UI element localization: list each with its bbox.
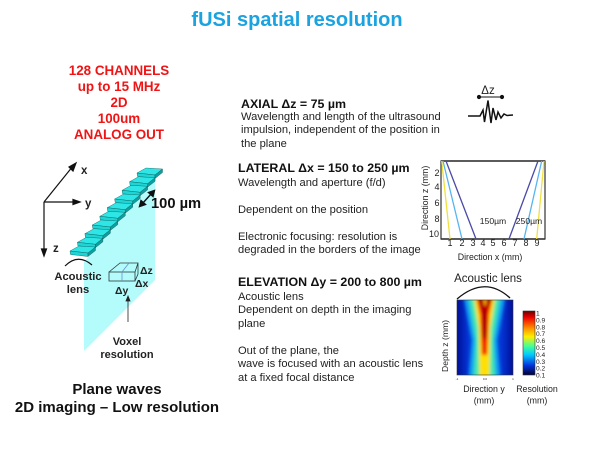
probe specifications: 2D <box>110 95 128 110</box>
transducer array <box>70 168 162 256</box>
plane waves caption: Plane waves <box>72 381 162 398</box>
lateral text: Wavelength and aperture (f/d) <box>238 176 386 188</box>
pulse icon <box>468 85 513 123</box>
acoustic lens heatmap: Acoustic lens <box>454 273 522 285</box>
acoustic lens label: Acoustic <box>54 271 102 283</box>
axes <box>42 163 80 256</box>
voxel cube <box>109 263 138 281</box>
acoustic lens label: lens <box>67 284 89 296</box>
elevation text <box>238 290 423 384</box>
lateral chart: 4 <box>480 238 486 248</box>
axis labels: z <box>53 243 59 255</box>
acoustic lens heatmap: Depth z (mm) <box>440 320 450 372</box>
acoustic lens heatmap: Direction y <box>463 384 505 394</box>
lateral text: Electronic focusing: resolution is <box>238 231 397 243</box>
lateral chart: 2 <box>459 238 465 248</box>
axial text: Wavelength and length of the ultrasound <box>241 110 441 122</box>
colorbar: 0.5 <box>536 345 545 352</box>
pulse icon: Δz <box>481 85 495 97</box>
lateral text: Dependent on the position <box>238 204 368 216</box>
acoustic lens heatmap: (mm) <box>474 396 494 406</box>
voxel dimensions: Δx <box>135 278 149 290</box>
lateral chart: 2 <box>434 168 440 178</box>
lateral chart: Direction x (mm) <box>458 252 522 262</box>
acoustic lens heatmap: -1 <box>456 377 459 381</box>
acoustic lens heatmap: 0.0 <box>483 377 487 381</box>
colorbar <box>516 310 558 406</box>
lateral heading: LATERAL Δx = 150 to 250 µm <box>238 161 410 175</box>
lateral chart: 7 <box>512 238 518 248</box>
colorbar: 0.2 <box>536 366 545 373</box>
lateral chart: 9 <box>534 238 540 248</box>
probe specifications: 100um <box>98 111 140 126</box>
probe specifications: 128 CHANNELS <box>69 63 169 78</box>
colorbar: 0.6 <box>536 338 545 345</box>
axial heading: AXIAL Δz = 75 µm <box>241 97 346 111</box>
colorbar: Resolution <box>516 384 558 394</box>
diagram: probe and imaging plane <box>40 86 558 406</box>
lateral text: degraded in the borders of the image <box>238 244 421 256</box>
axial text: the plane <box>241 138 287 150</box>
probe specifications: ANALOG OUT <box>74 127 164 142</box>
axis labels: x <box>81 165 88 177</box>
lateral chart: 5 <box>490 238 496 248</box>
probe specifications <box>69 63 169 142</box>
lateral chart: 6 <box>501 238 507 248</box>
colorbar: 0.1 <box>536 372 545 380</box>
voxel dimensions: Δz <box>140 265 153 277</box>
lateral chart: 3 <box>470 238 476 248</box>
lateral chart: 8 <box>434 214 440 224</box>
voxel dimensions: Δy <box>115 285 129 297</box>
pitch label: 100 µm <box>151 196 201 212</box>
axis labels <box>53 165 92 255</box>
elevation text: Dependent on depth in the imaging <box>238 304 411 316</box>
acoustic lens arc <box>65 259 92 266</box>
voxel resolution label: Voxel <box>113 336 141 348</box>
lateral chart: 8 <box>523 238 529 248</box>
elevation text: wave is focused with an acoustic lens <box>238 358 423 370</box>
lateral text <box>238 176 421 256</box>
lateral chart <box>420 161 545 262</box>
voxel resolution label: resolution <box>100 349 154 361</box>
acoustic lens heatmap: 1 <box>512 377 514 381</box>
colorbar: 0.9 <box>536 317 545 324</box>
voxel arrow <box>126 296 130 322</box>
lateral chart: 1 <box>447 238 453 248</box>
colorbar: 0.4 <box>536 352 545 359</box>
elevation text: Acoustic lens <box>238 290 304 302</box>
acoustic lens heatmap <box>440 273 522 406</box>
elevation text: at a fixed focal distance <box>238 372 354 384</box>
lateral chart: 150µm <box>480 216 506 226</box>
elevation text: plane <box>238 318 265 330</box>
imaging plane <box>84 180 155 351</box>
plane waves caption <box>15 381 219 416</box>
probe specifications: up to 15 MHz <box>78 79 160 94</box>
lateral chart: 10 <box>429 229 439 239</box>
elevation heading: ELEVATION Δy = 200 to 800 µm <box>238 275 422 289</box>
lateral chart: 6 <box>434 198 440 208</box>
element pitch arrow <box>140 190 154 206</box>
elevation text: Out of the plane, the <box>238 345 339 357</box>
colorbar: (mm) <box>527 396 547 406</box>
colorbar: 0.7 <box>536 331 545 338</box>
lateral chart: 250µm <box>516 216 542 226</box>
lateral chart: Direction z (mm) <box>420 166 430 230</box>
voxel dimensions <box>115 265 153 297</box>
plane waves caption: 2D imaging – Low resolution <box>15 398 219 416</box>
axial text: impulsion, independent of the position in <box>241 124 440 136</box>
axis labels: y <box>85 198 92 210</box>
colorbar: 0.3 <box>536 359 545 366</box>
lateral chart: 4 <box>434 182 440 192</box>
axial text <box>241 110 441 150</box>
title: fUSi spatial resolution <box>191 9 403 31</box>
colorbar: 1 <box>536 310 540 318</box>
colorbar: 0.8 <box>536 324 545 331</box>
